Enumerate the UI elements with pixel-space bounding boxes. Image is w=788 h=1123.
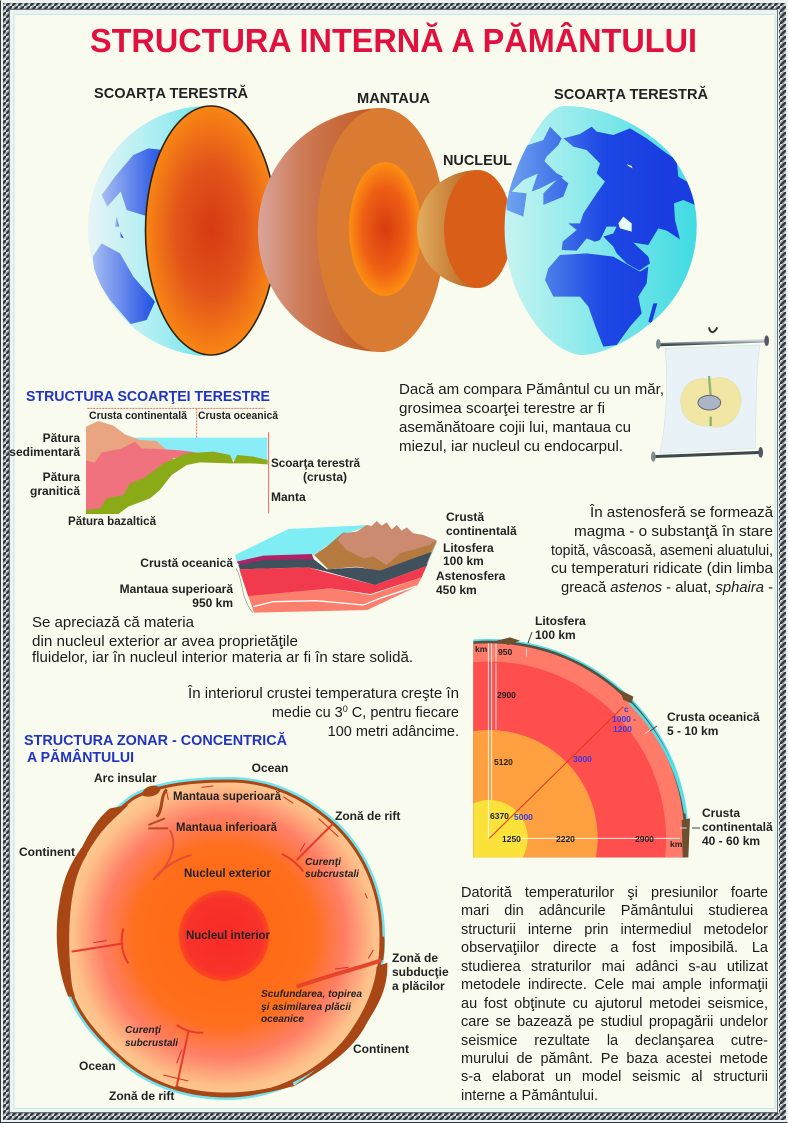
apple comparison text	[399, 382, 664, 455]
apple comparison text: miezul, iar nucleul cu endocarpul.	[399, 439, 623, 455]
asthenosphere text: greacă astenos - aluat, sphaira -	[561, 580, 773, 596]
concentric diagram labels: Ocean	[252, 761, 288, 775]
wedge chart: earth quarter section: continentală	[702, 820, 773, 834]
panel: concentric structure	[19, 732, 449, 1103]
block diagram: lithosphere: 450 km	[436, 583, 477, 597]
concentric diagram labels: subcrustali	[125, 1037, 179, 1049]
temperature text: 0	[343, 704, 348, 714]
heading: A PĂMÂNTULUI	[27, 748, 134, 766]
core matter text: Se apreciază că materia	[32, 615, 195, 631]
seismic method paragraph: studierea straturilor mai adânci s-au utilizat	[461, 959, 768, 975]
cross-section labels: Manta	[271, 490, 306, 504]
block diagram: lithosphere: Crustă	[446, 510, 484, 524]
concentric diagram labels: Zonă de rift	[335, 809, 400, 823]
concentric diagram labels: Continent	[19, 845, 75, 859]
seismic method paragraph: care se bazează pe studiul propagării undelor	[461, 1014, 768, 1030]
seismic method paragraph: murului de pământ. Pe baza acestei metode	[461, 1051, 768, 1067]
seismic method paragraph: Datorită temperaturilor şi presiunilor foarte	[461, 885, 768, 901]
temperature text: În interiorul crustei temperatura creşte în	[187, 685, 459, 702]
cross-section labels: granitică	[30, 484, 80, 498]
wedge chart: earth quarter section: 2220	[556, 834, 575, 844]
title: STRUCTURA INTERNĂ A PĂMÂNTULUI	[90, 22, 697, 59]
asthenosphere text	[551, 504, 774, 596]
wedge chart: earth quarter section: 5 - 10 km	[667, 724, 718, 738]
label: mantle: MANTAUA	[357, 90, 430, 107]
wedge chart: earth quarter section: 1000 -	[612, 714, 636, 724]
block diagram: lithosphere: Litosfera	[443, 541, 494, 555]
asthenosphere text: topită, vâscoasă, asemeni aluatului,	[551, 543, 773, 559]
apple comparison text: asemănătoare cojii lui, mantaua cu	[399, 420, 631, 436]
wedge chart: earth quarter section: Crusta oceanică	[667, 710, 760, 724]
seismic method paragraph: observaţiilor directe a fost imposibilă. La	[461, 940, 768, 956]
wedge chart: earth quarter section: 950	[498, 647, 512, 657]
temperature text: C, pentru fiecare	[348, 705, 459, 721]
concentric diagram labels	[19, 761, 449, 1103]
label: right crust: SCOARŢA TERESTRĂ	[554, 86, 708, 103]
concentric diagram labels: Ocean	[79, 1059, 116, 1073]
apple comparison text: Dacă am compara Pământul cu un măr,	[399, 382, 664, 398]
seismic method paragraph: interne a Pământului.	[461, 1088, 598, 1104]
cross-section labels: Pătura	[43, 431, 80, 445]
label: nucleus: NUCLEUL	[443, 152, 512, 169]
cross-section labels: Scoarţa terestră	[271, 456, 360, 470]
wedge chart: earth quarter section: 2900	[635, 834, 654, 844]
asthenosphere text: În astenosferă se formează	[589, 504, 774, 521]
panel: crust structure	[9, 389, 360, 528]
block diagram: lithosphere: 100 km	[443, 554, 484, 568]
cross-section labels	[9, 410, 360, 528]
wedge chart: earth quarter section: 3000	[573, 754, 592, 764]
globe exploded diagram	[88, 106, 697, 356]
wedge chart: earth quarter section: Crusta	[702, 806, 740, 820]
temperature text: medie cu 3	[272, 705, 343, 721]
wedge chart: earth quarter section	[473, 616, 773, 858]
concentric diagram labels: Zonă de	[392, 951, 438, 965]
asthenosphere text: cu temperaturi ridicate (din limba	[551, 561, 774, 577]
concentric diagram labels: Scufundarea, topirea	[261, 988, 362, 1000]
heading	[24, 732, 288, 766]
concentric diagram labels: subcrustali	[305, 868, 360, 880]
wedge chart: earth quarter section: 1250	[502, 834, 521, 844]
right globe: earth crust with continents	[505, 106, 697, 355]
temperature text	[187, 685, 459, 740]
concentric diagram labels: şi asimilarea plăcii	[261, 1001, 352, 1013]
label: left crust: SCOARŢA TERESTRĂ	[94, 85, 248, 102]
cross-section labels: Pătura bazaltică	[68, 514, 156, 528]
block diagram: lithosphere	[120, 510, 517, 613]
cross-section chart	[86, 408, 269, 514]
seismic method paragraph: s-a elaborat un model seismic al structurii	[461, 1069, 768, 1085]
seismic method paragraph	[461, 885, 768, 1104]
cross-section labels: Crusta continentală	[89, 410, 188, 422]
wedge chart: earth quarter section: km	[670, 839, 683, 849]
concentric earth diagram	[57, 781, 387, 1096]
concentric diagram labels: Nucleul interior	[186, 928, 270, 942]
block diagram: lithosphere: Astenosfera	[436, 569, 506, 583]
wedge chart: earth quarter section: 40 - 60 km	[702, 834, 760, 848]
wedge chart: earth quarter section: 5000	[514, 812, 533, 822]
concentric diagram labels: Curenţi	[305, 856, 342, 868]
asthenosphere text: magma - o substanţă în stare	[574, 524, 773, 540]
left globe: earth crust	[88, 106, 276, 356]
core matter text: din nucleul exterior ar avea proprietăţile	[32, 634, 298, 650]
wedge chart: earth quarter section: Litosfera	[535, 614, 586, 628]
wedge chart: earth quarter section: 6370	[490, 811, 509, 821]
seismic method paragraph: mari din adâncurile Pământului studierea	[461, 903, 768, 919]
cross-section labels: Crusta oceanică	[198, 410, 279, 422]
wedge chart: earth quarter section: 5120	[494, 757, 513, 767]
concentric diagram labels: Curenţi	[125, 1024, 162, 1036]
concentric diagram labels: Arc insular	[94, 771, 157, 785]
concentric diagram labels: Mantaua inferioară	[176, 820, 277, 834]
concentric diagram labels: oceanice	[261, 1013, 304, 1025]
core matter text	[32, 615, 413, 666]
wedge chart: earth quarter section: km	[475, 644, 488, 654]
mantle	[258, 108, 445, 352]
wedge chart: earth quarter section: c	[624, 704, 629, 714]
block diagram: lithosphere: continentală	[446, 524, 517, 538]
concentric diagram labels: Nucleul exterior	[184, 866, 271, 880]
concentric diagram labels: subducţie	[392, 965, 449, 979]
wedge chart: earth quarter section: 2900	[497, 690, 516, 700]
heading: STRUCTURA SCOARŢEI TERESTRE	[26, 389, 270, 405]
concentric diagram labels: Zonă de rift	[109, 1089, 174, 1103]
seismic method paragraph: seismice rezultate la declanşarea cutre-	[461, 1032, 768, 1048]
seismic method paragraph: metodele indirecte. Cele mai ample informaţii	[461, 977, 768, 993]
block diagram: lithosphere: 950 km	[192, 596, 233, 610]
wedge chart: earth quarter section: 100 km	[535, 628, 576, 642]
block diagram: lithosphere: Mantaua superioară	[120, 582, 233, 596]
nucleus	[417, 170, 512, 288]
heading: STRUCTURA ZONAR - CONCENTRICĂ	[24, 732, 288, 749]
concentric diagram labels: Continent	[353, 1042, 409, 1056]
temperature text: 100 metri adâncime.	[328, 724, 459, 740]
block diagram: lithosphere: Crustă oceanică	[140, 556, 233, 570]
cross-section labels: sedimentară	[9, 445, 80, 459]
icon: apple scroll	[651, 327, 769, 462]
seismic method paragraph: structurii interne prin intermediul metodelor	[461, 922, 768, 938]
apple comparison text: grosimea scoarţei terestre ar fi	[399, 401, 605, 417]
seismic method paragraph: au fost obţinute cu ajutorul metodei seismice,	[461, 996, 768, 1012]
cross-section labels: Pătura	[43, 470, 80, 484]
core matter text: fluidelor, iar în nucleul interior materia ar fi în stare solidă.	[32, 650, 413, 666]
wedge chart: earth quarter section: 1200	[613, 724, 632, 734]
cross-section labels: (crusta)	[303, 470, 347, 484]
concentric diagram labels: Mantaua superioară	[173, 789, 281, 803]
concentric diagram labels: a plăcilor	[392, 979, 445, 993]
